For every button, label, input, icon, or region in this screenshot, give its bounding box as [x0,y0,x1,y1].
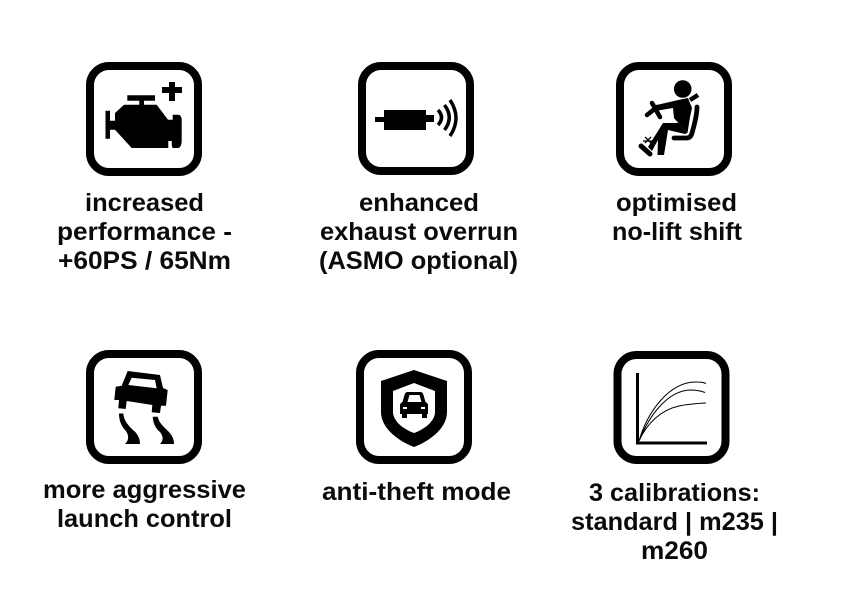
label: enhanced exhaust overrun [319,189,518,275]
label: increased performance: increased [85,189,204,217]
icon: seated driver [620,66,728,172]
label: optimised no-lift shift [612,189,743,246]
label: increased performance [57,189,232,275]
label: enhanced exhaust overrun: (ASMO optional) [319,247,518,275]
panel: 3 calibrations [571,355,778,565]
label: 3 calibrations [571,479,778,565]
label: launch control: launch control [57,505,232,533]
icon: exhaust with sound waves [362,66,470,171]
label: 3 calibrations: standard | m235 | [571,508,778,536]
panel: anti-theft mode [322,354,511,506]
panel: optimised no-lift shift [612,66,743,246]
label: enhanced exhaust overrun: enhanced [359,189,479,217]
label: enhanced exhaust overrun: exhaust overrun [320,218,518,246]
label: 3 calibrations: 3 calibrations: [589,479,760,507]
label: optimised no-lift shift: optimised [616,189,737,217]
icon: shield with car [360,354,468,460]
label: optimised no-lift shift: no-lift shift [612,218,743,246]
icon: skidding car [90,354,198,460]
label: anti-theft mode: anti-theft mode [322,478,511,506]
label: increased performance: +60PS / 65Nm [58,247,231,275]
label: 3 calibrations: m260 [641,537,708,565]
panel: launch control [43,354,246,533]
icon: power curves chart [618,355,726,460]
label: increased performance: performance - [57,218,232,246]
icon: engine with plus [90,66,198,172]
label: launch control: more aggressive [43,476,246,504]
panel: increased performance [57,66,232,275]
panel: enhanced exhaust overrun [319,66,518,275]
label: launch control [43,476,246,533]
